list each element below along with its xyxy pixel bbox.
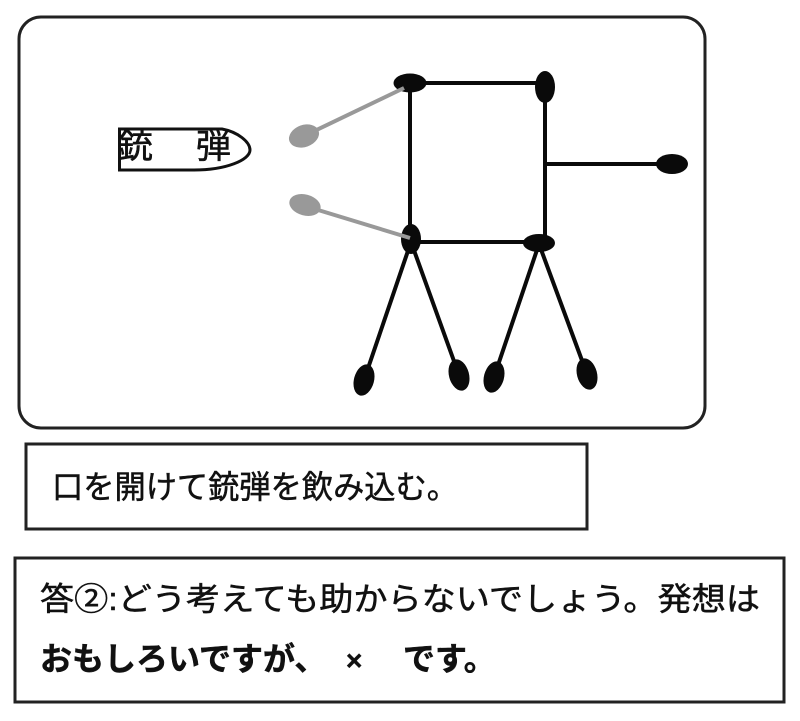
answer text line 2: × — [346, 645, 362, 676]
stick figure: black joints — [350, 71, 688, 398]
panel: diagram frame — [19, 17, 705, 428]
caption box — [26, 444, 587, 529]
stick figure: grey lower jaw — [287, 191, 410, 238]
answer text line 2: おもしろいですが、 — [40, 641, 326, 677]
icon: bullet labelled 銃弾: 銃 — [118, 128, 153, 166]
caption box: 口を開けて銃弾を飲み込む。 — [52, 469, 458, 505]
icon: bullet labelled 銃弾: 弾 — [196, 128, 231, 166]
answer box — [15, 558, 784, 702]
stick figure: grey upper jaw — [286, 88, 404, 152]
answer text line 2: です。 — [403, 641, 496, 677]
stick figure: body lines — [364, 83, 672, 380]
answer text line 1: 答②:どう考えても助からないでしょう。発想は — [40, 581, 760, 617]
icon: bullet labelled 銃弾 — [118, 128, 250, 170]
